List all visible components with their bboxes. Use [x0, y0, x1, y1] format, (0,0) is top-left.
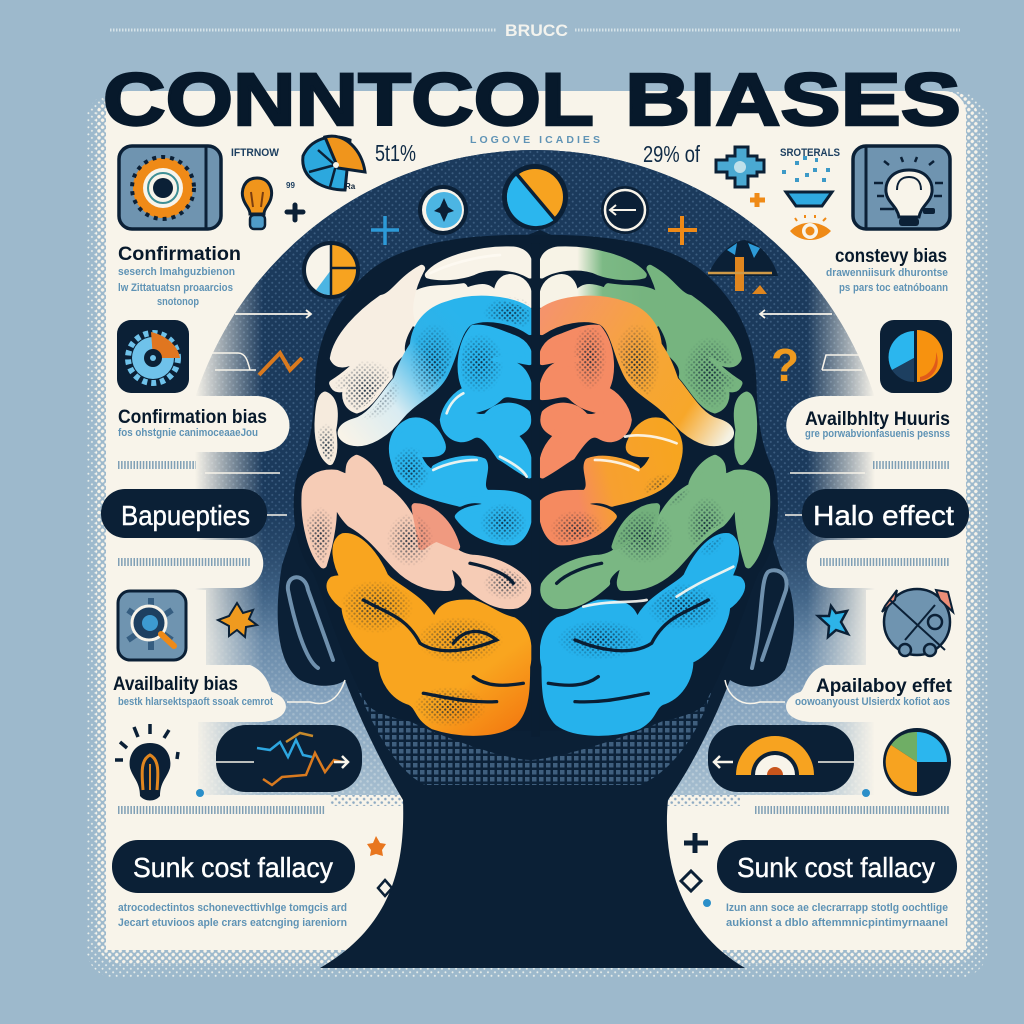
left hemisphere lobes — [305, 250, 530, 732]
icon: droplet tray — [782, 158, 832, 206]
title: BIASES — [625, 58, 961, 141]
header rule with brand label: BRUCC — [505, 21, 568, 40]
icon: pie card — [880, 320, 952, 393]
text block: confirmation: Confirmation — [118, 243, 241, 265]
left cream bubbles over halo — [106, 230, 290, 795]
connector hook right — [725, 680, 785, 703]
center fissure — [531, 243, 540, 737]
dot lower right — [703, 899, 711, 907]
halo behind head — [178, 150, 892, 795]
icon: dark bulb — [115, 724, 178, 800]
text block: availability effect: Apailaboy effet — [816, 675, 952, 697]
title — [103, 58, 961, 141]
icon: magnifier card — [118, 591, 186, 660]
pill: sunk cost right: Sunk cost fallacy — [737, 852, 935, 883]
icon: orange star — [218, 603, 257, 637]
right hemisphere lobes — [542, 250, 767, 732]
icon: blue plus — [371, 216, 399, 245]
tick rule bottom right — [755, 806, 950, 814]
text block: constevy bias: drawenniisurk dhurontse — [826, 267, 948, 279]
text block: bottom right: aukionst a dblo aftemmnicpintimyrnaanel — [726, 917, 948, 929]
cream lower panel area — [106, 795, 966, 950]
pill: bapuepties — [101, 489, 287, 538]
subtitle: LOGOVE ICADIES — [470, 134, 600, 146]
connector right — [822, 355, 862, 370]
tick rule bottom left — [118, 806, 325, 814]
icon: machine gear — [882, 589, 953, 656]
text block: bottom right: Izun ann soce ae clecrarrapp stotlg oochtlige — [726, 902, 948, 914]
pill: sunk cost right — [717, 840, 957, 893]
text block: confirmation: lw Zittatuatsn proaarcios — [118, 282, 233, 294]
text block: availability heuristic — [805, 408, 950, 440]
icon: orange plus — [668, 216, 697, 245]
icon: question mark: ? — [771, 339, 799, 391]
text block: confirmation: seserch lmahguzbienon — [118, 266, 235, 278]
zigzag arrow — [259, 353, 302, 375]
icon: small orange star — [367, 836, 386, 856]
tick rule right — [873, 461, 950, 469]
small mark: 99 — [286, 181, 295, 190]
arch pill — [708, 725, 854, 792]
text block: bottom right — [726, 902, 948, 929]
tick rule left — [118, 461, 196, 469]
tick rule under pill right — [820, 558, 950, 566]
icon: puzzle cross — [716, 147, 764, 187]
text block: constevy bias — [826, 245, 948, 294]
dot right — [862, 789, 870, 797]
icon: navy plus right — [684, 833, 708, 853]
pill: bapuepties: Bapuepties — [121, 500, 250, 531]
top center circle: middle — [502, 164, 568, 230]
pie chart — [883, 728, 951, 796]
text block: availability effect: oowoanyoust Ulsierdx kofiot aos — [795, 696, 950, 708]
text block: confirmation bias — [118, 406, 267, 439]
icon: lightbulb card — [853, 146, 950, 229]
icon: half gear — [117, 320, 189, 393]
brain creases — [363, 563, 708, 702]
pill: halo effect — [785, 489, 969, 538]
icon: small orange plus — [750, 193, 765, 207]
head silhouette and neck — [278, 230, 794, 968]
small label left: IFTRNOW — [231, 147, 280, 159]
icon: orange eye — [790, 215, 831, 240]
text block: confirmation: snotonop — [157, 296, 199, 308]
icon: orange bulb — [242, 178, 272, 229]
top center circle: right — [601, 186, 649, 234]
ears — [288, 570, 787, 668]
text block: bottom left: atrocodectintos schonevecttivhlge tomgcis ard — [118, 902, 347, 914]
text block: availability heuristic: Availbhlty Huuris — [805, 408, 950, 430]
halftone shading — [307, 297, 734, 726]
text block: availability bias: Availbality bias — [113, 673, 238, 695]
text block: bottom left: Jecart etuvioos aple crars eatcnging iareniorn — [118, 917, 347, 929]
text block: availability bias — [113, 673, 273, 708]
icon: fan pie — [303, 136, 365, 191]
icon: navy plus — [287, 205, 303, 220]
dot — [196, 789, 204, 797]
icon: diamond left — [378, 880, 392, 896]
icon: gear card — [119, 146, 221, 229]
text block: availability heuristic: gre porwabvionfasuenis pesnss — [805, 428, 950, 440]
text block: confirmation bias: fos ohstgnie canimoceaaeJou — [118, 427, 258, 439]
icon: diamond right — [681, 871, 701, 891]
arrow right upper — [760, 310, 832, 318]
text block: constevy bias: ps pars toc eatnóboann — [839, 282, 948, 294]
text block: bottom left — [118, 902, 347, 929]
text block: availability effect — [795, 675, 952, 708]
connector left — [210, 353, 256, 370]
pill: sunk cost left: Sunk cost fallacy — [133, 852, 333, 883]
small label right: SROTERALS — [780, 147, 840, 159]
top center circle: left — [418, 185, 468, 235]
text block: constevy bias: constevy bias — [835, 245, 947, 267]
stat left: 5t1% — [375, 140, 416, 166]
chart pill — [216, 725, 362, 792]
pill: sunk cost left — [112, 840, 355, 893]
brain dark base — [294, 235, 778, 731]
tick rule under pill left — [118, 558, 250, 566]
text block: availability bias: bestk hlarsektspaoft ssoak cemrot — [118, 696, 273, 708]
title: CONNTCOL — [103, 58, 594, 141]
icon: blue star cross — [818, 606, 848, 637]
arrow left upper — [235, 310, 311, 318]
connector hook left — [287, 680, 345, 703]
text block: confirmation bias: Confirmation bias — [118, 406, 267, 428]
icon: fan pie: Ra — [345, 182, 356, 191]
icon: tilted scale — [708, 240, 778, 294]
brain — [294, 234, 778, 736]
stat right: 29% of — [643, 141, 700, 167]
pie: left of brain — [302, 241, 360, 299]
right cream bubbles over halo — [786, 230, 966, 795]
pill: halo effect: Halo effect — [813, 500, 954, 531]
text block: confirmation — [118, 243, 241, 308]
brain highlights — [430, 255, 733, 607]
cream panel — [86, 91, 988, 978]
